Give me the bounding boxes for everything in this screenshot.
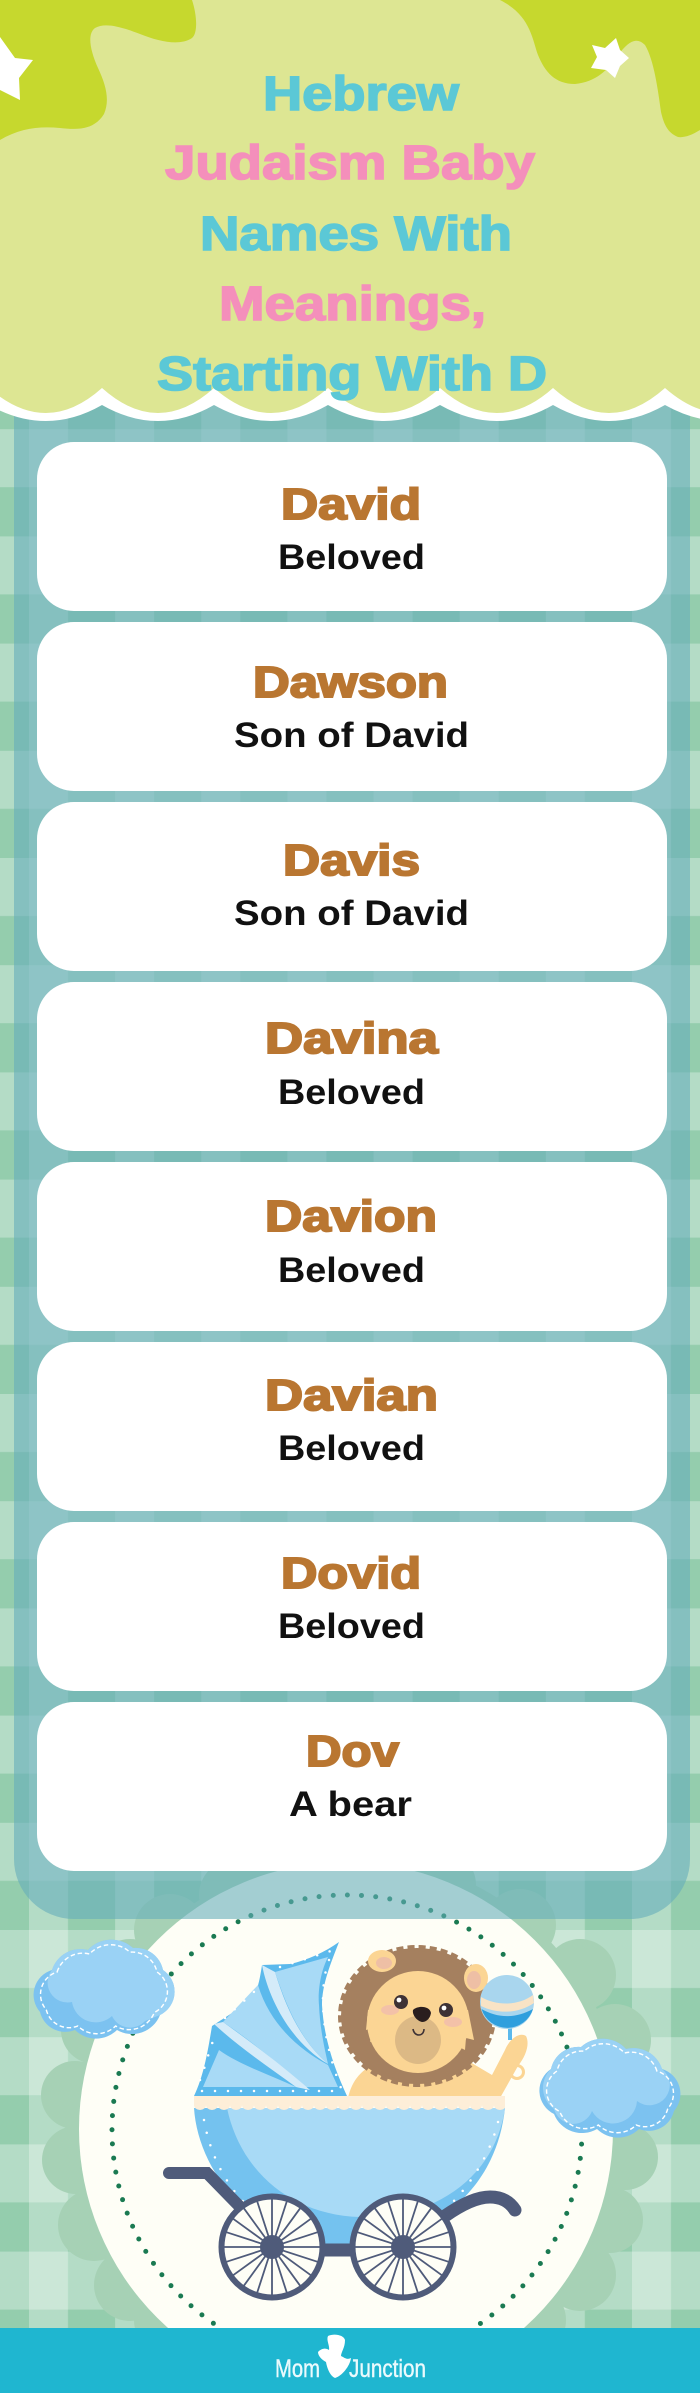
scalloped green backdrop	[41, 1839, 658, 2393]
card: Davis	[37, 802, 667, 971]
card: David: David	[281, 480, 421, 529]
cloud left	[34, 1940, 175, 2039]
card: Dov: A bear	[289, 1785, 412, 1824]
logo text: Mom	[275, 2355, 320, 2383]
name cards list	[37, 442, 667, 1871]
pram trim	[194, 2096, 505, 2110]
card: Dov: Dov	[306, 1727, 400, 1776]
card: Dawson: Dawson	[253, 658, 448, 707]
header band	[0, 0, 700, 421]
translucent list panel	[14, 400, 690, 1919]
star right	[591, 38, 629, 78]
card: Davis: Davis	[283, 836, 420, 885]
title: Starting With D	[157, 348, 547, 401]
pram canopy	[194, 1942, 347, 2096]
rattle	[480, 1975, 534, 2040]
card: Davion	[37, 1162, 667, 1331]
card: Davion: Davion	[265, 1192, 437, 1241]
card: Davian: Davian	[265, 1371, 438, 1420]
pram bowl	[194, 2108, 505, 2245]
pram handles and axle	[169, 2173, 515, 2250]
footer bar	[0, 2328, 700, 2393]
illustration: lion in baby pram	[169, 1942, 534, 2298]
cloud right	[539, 2039, 680, 2138]
card: Davian: Beloved	[278, 1429, 425, 1468]
icon: mother and child	[318, 2335, 351, 2378]
white circle medallion	[79, 1862, 613, 2393]
card: Davina: Davina	[265, 1014, 439, 1063]
card: Davian	[37, 1342, 667, 1511]
corner blob right	[500, 0, 700, 137]
logo text: Junction	[349, 2355, 426, 2383]
left wheel	[222, 2196, 322, 2298]
card: Dovid	[37, 1522, 667, 1691]
lion body and arm	[348, 2035, 528, 2098]
corner blob left	[0, 0, 196, 140]
star left	[0, 37, 33, 100]
card: Davis: Son of David	[234, 894, 469, 933]
right wheel	[352, 2196, 454, 2298]
title	[157, 68, 547, 401]
MomJunction logo	[275, 2335, 426, 2383]
lion mane	[341, 1948, 493, 2084]
card: Dovid: Dovid	[281, 1549, 421, 1598]
card: Davion: Beloved	[278, 1251, 425, 1290]
card: Davina	[37, 982, 667, 1151]
card: David: Beloved	[278, 538, 425, 577]
lion face	[366, 1971, 474, 2073]
card: David	[37, 442, 667, 611]
header green fill	[0, 0, 700, 413]
card: Davina: Beloved	[278, 1073, 425, 1112]
card: Dawson: Son of David	[234, 716, 469, 755]
scalloped white edge	[0, 380, 700, 421]
card: Dov	[37, 1702, 667, 1871]
lion ears	[368, 1950, 488, 1992]
title: Hebrew	[263, 68, 460, 121]
card: Dawson	[37, 622, 667, 791]
title: Names With	[200, 208, 512, 261]
title: Meanings,	[219, 278, 486, 331]
dotted ring	[112, 1895, 582, 2365]
card: Dovid: Beloved	[278, 1607, 425, 1646]
title: Judaism Baby	[165, 137, 535, 190]
